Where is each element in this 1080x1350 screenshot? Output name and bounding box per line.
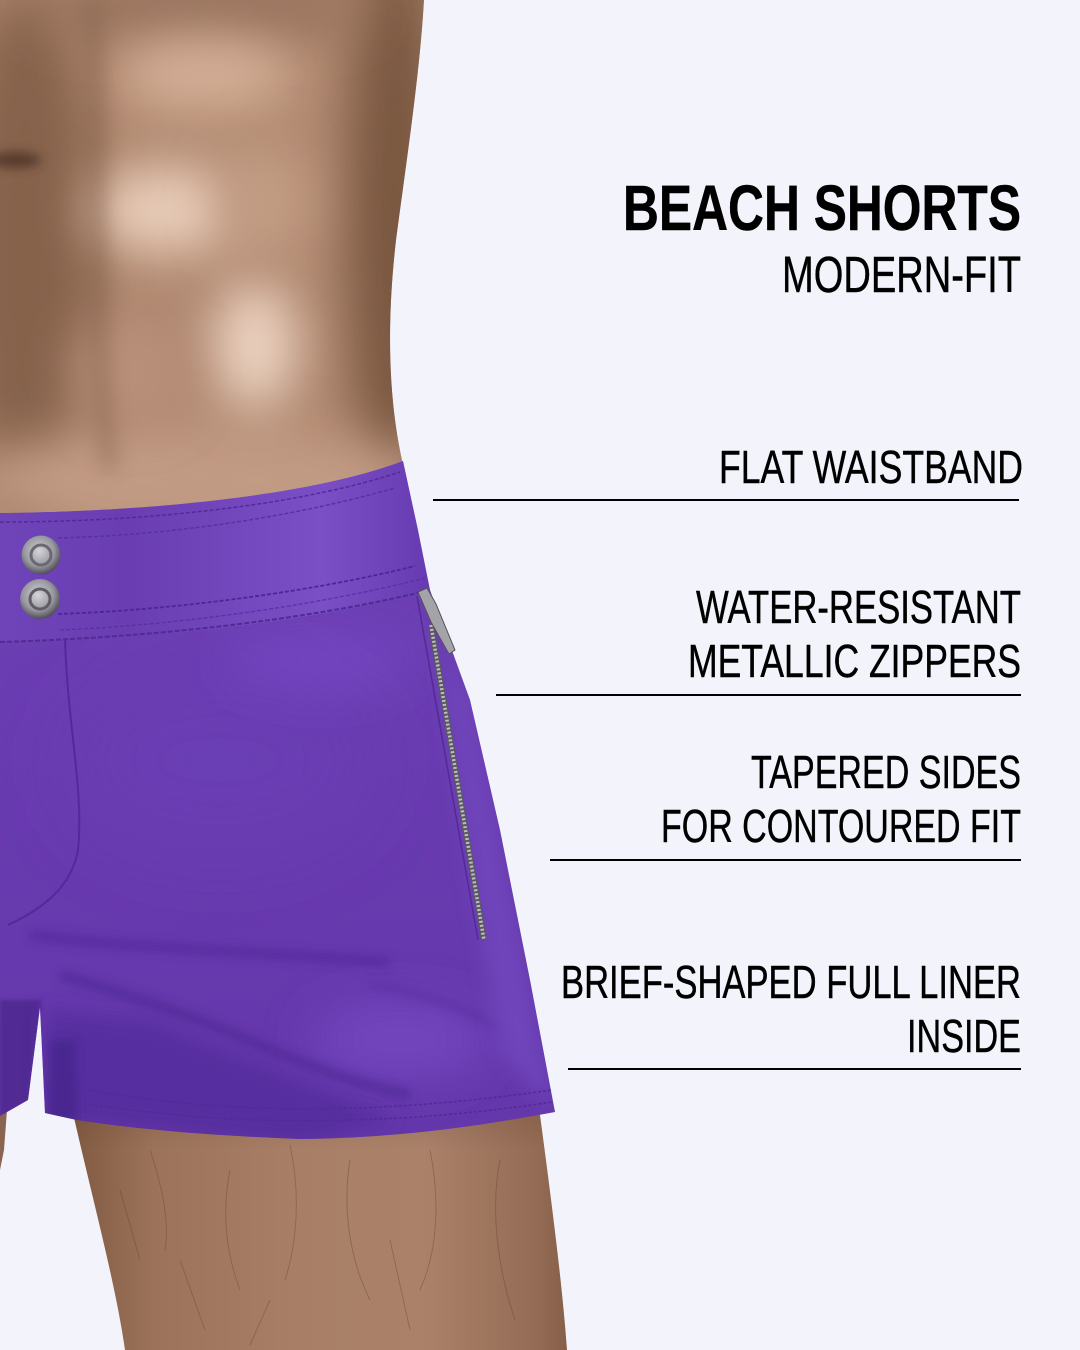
photo: torso	[0, 0, 443, 540]
fabric light	[70, 670, 370, 850]
waistband	[22, 461, 430, 630]
feature: tapered sides	[550, 746, 1021, 861]
feature: brief liner: INSIDE	[907, 1010, 1021, 1062]
icon: metallic zipper	[417, 588, 484, 940]
feature: brief liner	[561, 956, 1021, 1070]
folds	[30, 935, 390, 962]
far leg shade	[0, 1000, 42, 1118]
feature: metallic zippers	[496, 581, 1021, 696]
photo: left leg sliver	[0, 1110, 7, 1170]
waistband stitches	[0, 472, 400, 522]
photo: right thigh	[74, 1114, 567, 1350]
fly seam	[8, 640, 79, 925]
hem stitch	[90, 1090, 552, 1109]
side panel light	[458, 669, 553, 1100]
icon: waistband buttons	[20, 536, 60, 619]
photo: purple shorts	[0, 461, 555, 1145]
